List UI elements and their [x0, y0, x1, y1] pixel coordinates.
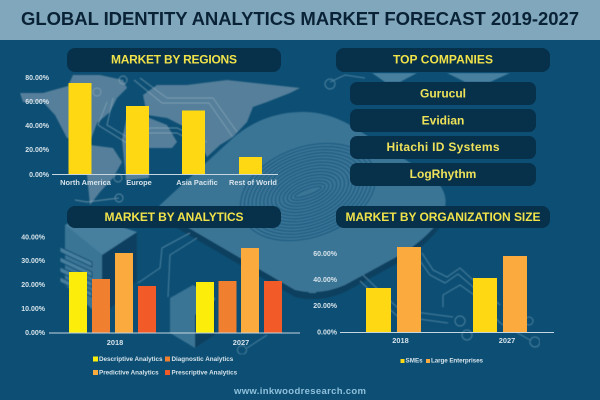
axis labels: regions: 40.00%	[25, 123, 50, 130]
legend: organization size	[400, 358, 483, 364]
category labels: organization size	[392, 336, 515, 345]
heading: market by regions: MARKET BY REGIONS	[111, 52, 237, 66]
axis labels: regions: 80.00%	[25, 75, 50, 82]
panel: market by regions	[25, 48, 281, 187]
world map backdrop	[20, 75, 300, 205]
axis labels: organization size: 20.00%	[313, 303, 338, 310]
axis labels: regions: 0.00%	[29, 172, 50, 179]
legend: analytics: Diagnostic Analytics	[172, 356, 234, 363]
category labels: regions: Rest of World	[229, 178, 277, 187]
axis labels: regions: 20.00%	[25, 147, 50, 154]
legend: analytics: Predictive Analytics	[99, 370, 159, 376]
company: Evidian: Evidian	[422, 114, 464, 128]
category labels: regions	[60, 178, 277, 187]
axis labels: organization size	[313, 251, 338, 336]
title banner: GLOBAL IDENTITY ANALYTICS MARKET FORECAST 2019-2027	[21, 8, 579, 29]
company: LogRhythm	[350, 163, 536, 186]
axis labels: analytics: 30.00%	[21, 258, 46, 265]
category labels: analytics: 2027	[233, 338, 249, 347]
bar chart: analytics	[49, 248, 300, 334]
chip blocks backdrop	[60, 73, 510, 348]
axis labels: organization size: 40.00%	[313, 277, 338, 284]
legend: analytics: Prescriptive Analytics	[172, 370, 238, 376]
axis labels: analytics: 40.00%	[21, 234, 46, 242]
website url: www.inkwoodresearch.com	[233, 386, 366, 397]
axis labels: analytics	[21, 234, 46, 337]
heading: top companies	[336, 48, 550, 72]
heading: top companies: TOP COMPANIES	[393, 52, 493, 66]
axis labels: organization size: 60.00%	[313, 251, 338, 258]
fingerprint	[240, 142, 376, 242]
category labels: regions: Europe	[126, 178, 152, 187]
bar chart: organization size	[340, 247, 554, 333]
company: Hitachi ID Systems: Hitachi ID Systems	[386, 140, 500, 154]
title banner	[0, 0, 600, 40]
company: Evidian	[350, 109, 536, 132]
legend: organization size: SMEs	[406, 358, 423, 364]
panel: top companies	[336, 48, 550, 186]
heading: market by analytics	[67, 206, 281, 228]
legend: analytics	[93, 356, 238, 376]
panel: market by organization size	[313, 206, 554, 364]
heading: market by organization size: MARKET BY ORGANIZATION SIZE	[346, 210, 540, 224]
category labels: analytics: 2018	[107, 338, 123, 347]
company: Gurucul: Gurucul	[420, 86, 466, 100]
category labels: regions: Asia Pacific	[176, 178, 218, 187]
axis labels: regions	[25, 75, 50, 179]
axis labels: regions: 60.00%	[25, 99, 50, 106]
category labels: organization size: 2027	[499, 336, 515, 345]
axis labels: analytics: 10.00%	[21, 306, 46, 313]
category labels: organization size: 2018	[392, 336, 409, 345]
category labels: regions: North America	[60, 178, 112, 187]
legend: organization size: Large Enterprises	[431, 358, 483, 364]
legend: analytics: Descriptive Analytics	[99, 356, 163, 363]
circuit traces backdrop	[138, 75, 540, 354]
axis labels: analytics: 20.00%	[21, 282, 46, 289]
category labels: analytics	[107, 338, 249, 347]
company: LogRhythm: LogRhythm	[410, 167, 476, 181]
heading: market by regions	[67, 48, 281, 72]
background artwork	[20, 73, 540, 354]
axis labels: organization size: 0.00%	[317, 330, 338, 336]
company: Hitachi ID Systems	[350, 136, 536, 159]
panel: market by analytics	[21, 206, 300, 376]
axis labels: analytics: 0.00%	[25, 330, 46, 337]
company: Gurucul	[350, 82, 536, 105]
heading: market by organization size	[336, 206, 550, 228]
circuit traces on map	[75, 76, 237, 202]
bar chart: regions	[52, 83, 278, 175]
fingerprint pad backdrop	[159, 112, 446, 299]
heading: market by analytics: MARKET BY ANALYTICS	[104, 210, 244, 224]
